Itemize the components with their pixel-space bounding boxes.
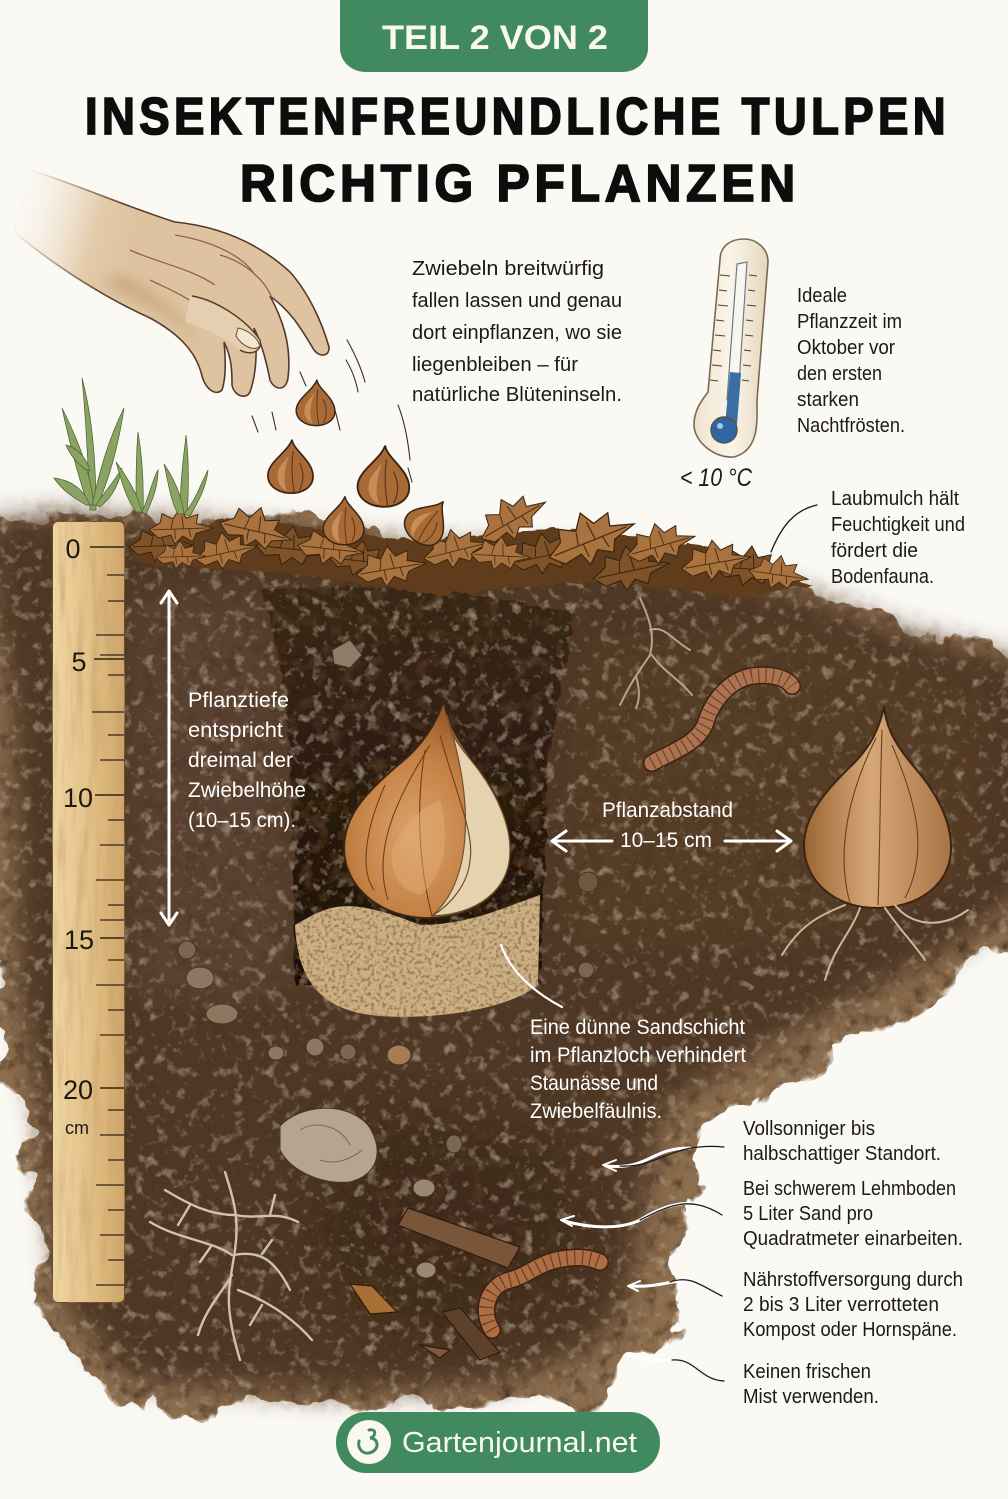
text: soil: 5 Liter Sand pro [743, 1203, 873, 1225]
text: planting depth: Zwiebelhöhe [188, 778, 306, 802]
text: drop instruction: dort einpflanzen, wo sie [412, 322, 622, 344]
text: drop instruction: Zwiebeln breitwürfig [412, 258, 604, 280]
text: sand layer: Zwiebelfäulnis. [530, 1099, 662, 1123]
soil right of hole [560, 620, 990, 950]
text: drop instruction [412, 258, 622, 406]
text: leaf mulch: Bodenfauna. [831, 566, 934, 588]
arrows: site notes [561, 1146, 724, 1381]
icon: worm upper [652, 675, 792, 763]
badge: website [336, 1412, 660, 1473]
text: nutrients: Nährstoffversorgung durch [743, 1269, 963, 1291]
planting hole [262, 585, 575, 985]
icons: stones and pebbles [178, 640, 598, 1278]
text: sand layer: Staunässe und [530, 1071, 658, 1095]
text: planting time: Nachtfrösten. [797, 415, 905, 437]
text: planting time: starken [797, 389, 859, 411]
text: drop instruction: fallen lassen und genau [412, 290, 622, 312]
text: leaf mulch: Feuchtigkeit und [831, 514, 965, 536]
text: planting time: Ideale [797, 285, 847, 307]
text: leaf mulch: fördert die [831, 540, 918, 562]
icon: thermometer [694, 239, 768, 457]
text: soil [743, 1178, 963, 1250]
thermometer label: < 10 °C [680, 464, 753, 492]
ruler: 10 [63, 783, 93, 813]
ruler: 15 [64, 925, 94, 955]
text: soil: Bei schwerem Lehmboden [743, 1178, 956, 1200]
panel: soil cross-section [0, 506, 1008, 1412]
soil left column [132, 590, 292, 1000]
text: planting time: Oktober vor [797, 337, 895, 359]
text: manure [743, 1361, 879, 1408]
badge: part label [340, 0, 648, 72]
text: sand layer: Eine dünne Sandschicht [530, 1015, 745, 1039]
text: plant spacing: 10–15 cm [620, 828, 712, 852]
ruler [52, 521, 125, 1303]
icon: roots lower [150, 1172, 312, 1360]
arrow: plant spacing [552, 831, 791, 851]
icon: green seedlings [54, 378, 208, 516]
icon: falling bulbs [252, 340, 459, 552]
arrow: planting depth [161, 591, 177, 925]
ruler: 20 [63, 1075, 93, 1105]
icon: bark pieces and leaf [350, 1208, 520, 1360]
icon: hand dropping bulbs [15, 170, 329, 396]
text: site [743, 1118, 941, 1165]
text: nutrients: Kompost oder Hornspäne. [743, 1319, 957, 1341]
title: RICHTIG PFLANZEN [240, 155, 800, 213]
text: soil: Quadratmeter einarbeiten. [743, 1228, 963, 1250]
text: planting depth: entspricht [188, 718, 283, 742]
text: planting time [797, 285, 905, 437]
text: planting time: den ersten [797, 363, 882, 385]
text: manure: Keinen frischen [743, 1361, 871, 1383]
badge: website: Gartenjournal.net [402, 1427, 637, 1459]
ruler: 5 [71, 647, 87, 677]
badge: part label: TEIL 2 VON 2 [382, 19, 608, 57]
icon: worm lower [486, 1257, 600, 1330]
text: planting depth [188, 688, 306, 832]
icon: roots near surface [620, 598, 692, 708]
text: site: Vollsonniger bis [743, 1118, 875, 1140]
text: leaf mulch: Laubmulch hält [831, 488, 959, 510]
arrow: mulch pointer [771, 505, 817, 552]
ruler: 0 [65, 534, 81, 564]
title [85, 88, 950, 213]
text: plant spacing: Pflanzabstand [602, 798, 733, 822]
text: planting depth: Pflanztiefe [188, 688, 289, 712]
text: drop instruction: natürliche Blüteninseln. [412, 384, 622, 406]
text: sand layer [530, 1015, 746, 1123]
icon: right tulip bulb [782, 706, 968, 980]
sand layer [295, 895, 540, 1017]
text: planting depth: dreimal der [188, 748, 293, 772]
ruler: cm [65, 1118, 89, 1138]
text: sand layer: im Pflanzloch verhindert [530, 1043, 746, 1067]
text: plant spacing [602, 798, 733, 852]
text: site: halbschattiger Standort. [743, 1143, 941, 1165]
text: nutrients: 2 bis 3 Liter verrotteten [743, 1294, 939, 1316]
text: planting time: Pflanzzeit im [797, 311, 902, 333]
deep shade [300, 1100, 600, 1350]
icon: main tulip bulb [344, 700, 510, 918]
arrow: sand pointer [501, 945, 562, 1007]
panel: leaf mulch layer [129, 482, 812, 598]
text: leaf mulch [831, 488, 965, 588]
text: nutrients [743, 1269, 963, 1341]
text: drop instruction: liegenbleiben – für [412, 354, 578, 376]
text: manure: Mist verwenden. [743, 1386, 879, 1408]
text: planting depth: (10–15 cm). [188, 808, 296, 832]
